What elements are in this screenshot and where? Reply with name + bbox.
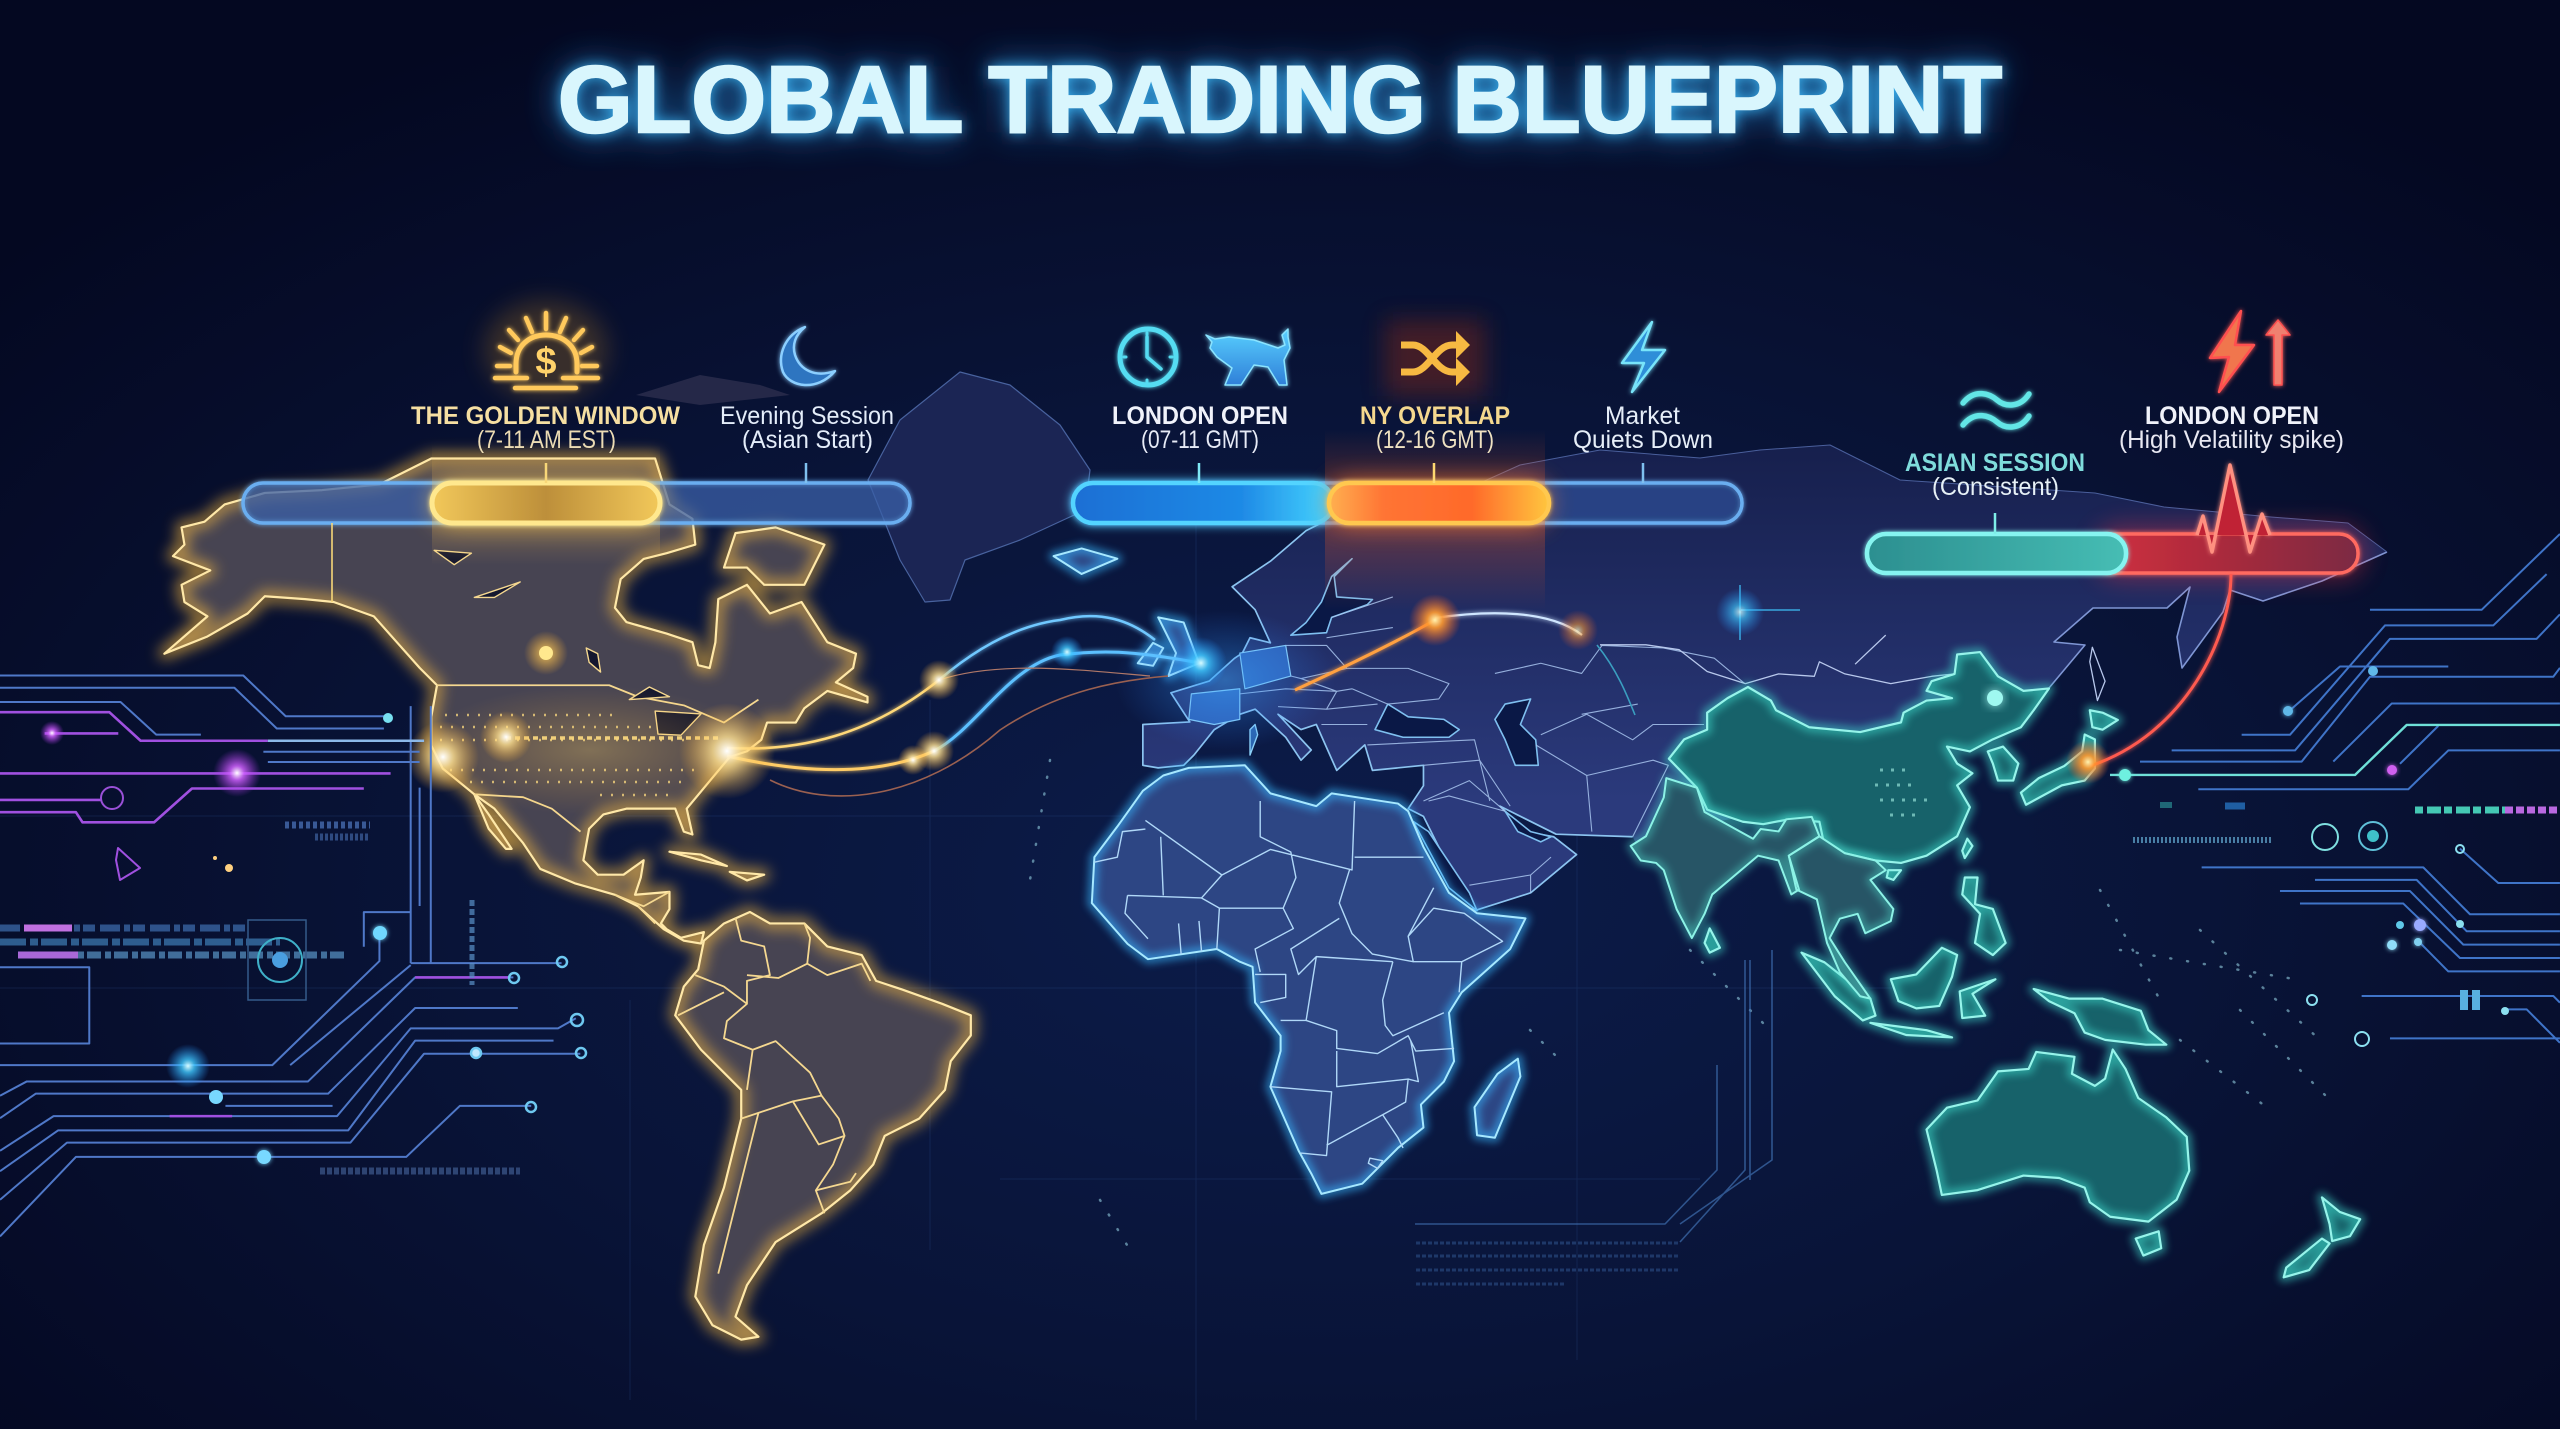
icon: red bolt and up arrow (2210, 311, 2290, 392)
label: asian session: ASIAN SESSION (1905, 449, 2085, 477)
map: Russia southern border line (1600, 635, 2105, 701)
glow column (432, 445, 660, 565)
panel: world map (164, 372, 2387, 1340)
label: market quiets down (1573, 402, 1713, 454)
circuit: right side traces (2110, 534, 2560, 1046)
map: Americas (164, 459, 971, 1340)
icon: sun with dollar: $ (535, 341, 557, 383)
timeline bar: ny overlap segment (1329, 480, 1549, 526)
label: market quiets down: Quiets Down (1573, 426, 1713, 454)
icon: shuffle arrows (1385, 320, 1485, 396)
icon: sun with dollar (484, 300, 608, 400)
small islands and dots (1030, 760, 2330, 1250)
label: london open volatility: LONDON OPEN (2145, 402, 2319, 430)
label: market quiets down: Market (1605, 402, 1680, 430)
glow column (1325, 430, 1545, 610)
icon: bull (1206, 329, 1290, 385)
timeline bar: asian session segment (1867, 534, 2126, 573)
circuit: left nodes (40, 713, 586, 1164)
text block: bottom centre readout (1415, 950, 1772, 1284)
title: GLOBAL TRADING BLUEPRINT (558, 47, 2002, 153)
map: Europe, Middle East and west Asia (1143, 505, 1800, 911)
title: GLOBAL TRADING BLUEPRINT (558, 47, 2002, 153)
label: ny overlap (1360, 402, 1510, 454)
label: evening session: Evening Session (720, 402, 894, 430)
icon: waves (1963, 394, 2029, 427)
label: evening session: (Asian Start) (742, 426, 873, 454)
map: Russia and northern Asia (1400, 445, 2387, 780)
panel: London and New York timeline (1073, 320, 1742, 689)
icon: clock (1120, 329, 1176, 385)
panel: Americas timeline (243, 300, 910, 675)
circuit: left data strips (0, 825, 520, 1171)
label: the golden window: (7-11 AM EST) (477, 426, 616, 454)
map: Atlantic and Eurasia trade arcs (679, 585, 1800, 799)
timeline bar: london segment (1073, 483, 1333, 523)
chart: volatility spike (2197, 465, 2270, 552)
label: the golden window (411, 402, 680, 454)
panel: Asia timeline (1867, 311, 2365, 784)
timeline bar: Europe track (1073, 483, 1742, 523)
timeline bar: Americas track (243, 483, 910, 523)
title: GLOBAL TRADING BLUEPRINT (558, 47, 2002, 153)
label: london open: (07-11 GMT) (1141, 426, 1259, 454)
arrow: red curve to Japan (2066, 574, 2231, 784)
connector: market quiets (1642, 463, 1644, 483)
connector: asian session (1987, 513, 2003, 706)
map: India and Indochina (1631, 778, 1893, 999)
timeline bar: red volatility segment (2095, 525, 2365, 580)
map: United States city lights (407, 685, 760, 815)
label: evening session (720, 402, 894, 454)
label: asian session: (Consistent) (1932, 473, 2059, 501)
label: london open: LONDON OPEN (1112, 402, 1288, 430)
timeline bar: golden window segment (432, 481, 660, 525)
label: ny overlap: NY OVERLAP (1360, 402, 1510, 430)
label: asian session (1905, 449, 2085, 501)
circuit: left side traces (0, 675, 586, 1236)
connector: london open (1175, 463, 1227, 689)
connector: ny overlap (1409, 463, 1461, 646)
map: Africa and Madagascar (1054, 548, 1526, 1194)
circuit: right data strips (2133, 805, 2560, 1000)
label: london open volatility (2119, 402, 2344, 454)
icon: crescent moon (781, 327, 835, 385)
label: the golden window: THE GOLDEN WINDOW (411, 402, 680, 430)
map: Greenland and Arctic islands (636, 372, 1090, 602)
connector: evening session (805, 463, 807, 483)
label: ny overlap: (12-16 GMT) (1376, 426, 1494, 454)
circuit: right nodes (2119, 666, 2509, 1046)
label: london open volatility: (High Velatility spike) (2119, 426, 2344, 454)
connector: golden window (332, 463, 568, 675)
faint coordinate grid (0, 500, 1900, 1420)
map: China city lights (1875, 770, 1930, 815)
map: Europe highlight glow (1115, 610, 1335, 750)
icon: lightning bolt (1622, 322, 1665, 392)
label: london open (1112, 402, 1288, 454)
map: China, Japan, Southeast Asia and Australia (1669, 652, 2360, 1277)
